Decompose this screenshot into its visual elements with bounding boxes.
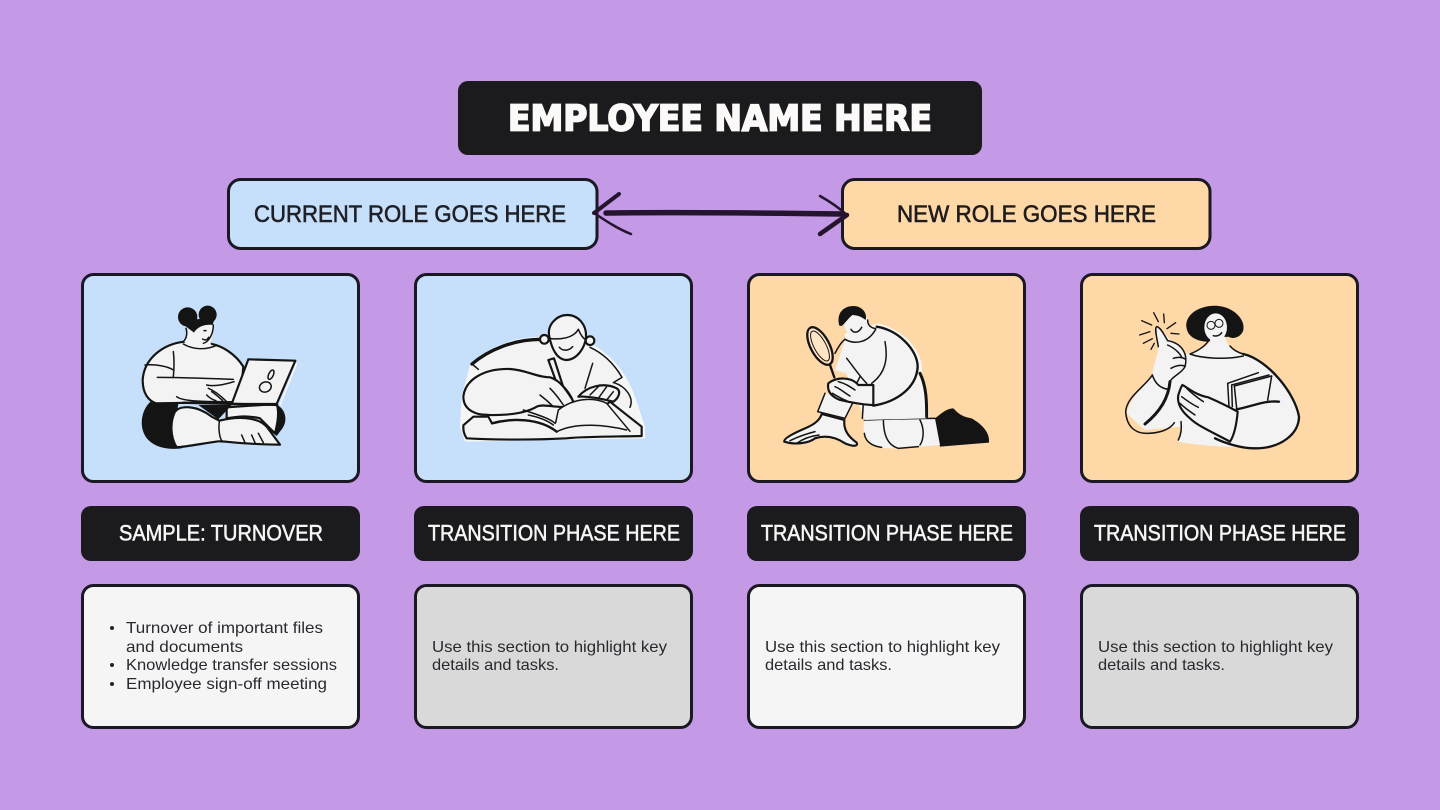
text panel 1: bullet list: Knowledge transfer sessions [126,657,337,674]
text panel 3 [748,586,1024,728]
panel: illustration card 2 [416,274,692,482]
current role box: CURRENT ROLE GOES HERE [254,201,566,228]
panel: illustration card 4 [1082,274,1358,482]
label: phase 1 [81,506,360,561]
text panel 2: Use this section to highlight key [432,639,667,656]
title banner [458,81,982,155]
text panel 1: bullet list: Employee sign-off meeting [126,676,327,693]
icon: person with laptop [142,306,297,449]
text panel 2: details and tasks. [432,657,559,674]
label: phase 1: SAMPLE: TURNOVER [119,520,323,546]
title banner: EMPLOYEE NAME HERE [508,98,932,140]
new role box: NEW ROLE GOES HERE [897,201,1156,228]
text panel 3: details and tasks. [765,657,892,674]
icon: kneeling person with magnifier [784,306,989,448]
new role box [842,180,1210,248]
text panel 1: bullet list: Turnover of important files [126,620,323,637]
label: phase 4: TRANSITION PHASE HERE [1094,520,1346,546]
text panel 1: bullet list: and documents [126,639,243,656]
label: phase 4 [1080,506,1359,561]
text panel 2 [416,586,692,728]
text panel 4: Use this section to highlight key [1098,639,1333,656]
text panel 3: Use this section to highlight key [765,639,1000,656]
text panel 1: bullet list [82,586,358,728]
icon: person with book pointing up [1126,306,1299,448]
panel: illustration card 1 [82,274,358,482]
panel: illustration card 3 [748,274,1024,482]
label: phase 3: TRANSITION PHASE HERE [761,520,1013,546]
label: phase 2: TRANSITION PHASE HERE [428,520,680,546]
current role box [228,180,597,248]
arrow: double-headed between roles [594,194,847,234]
label: phase 3 [747,506,1026,561]
label: phase 2 [414,506,693,561]
text panel 4 [1082,586,1358,728]
icon: person writing in a book [460,315,645,442]
text panel 4: details and tasks. [1098,657,1225,674]
